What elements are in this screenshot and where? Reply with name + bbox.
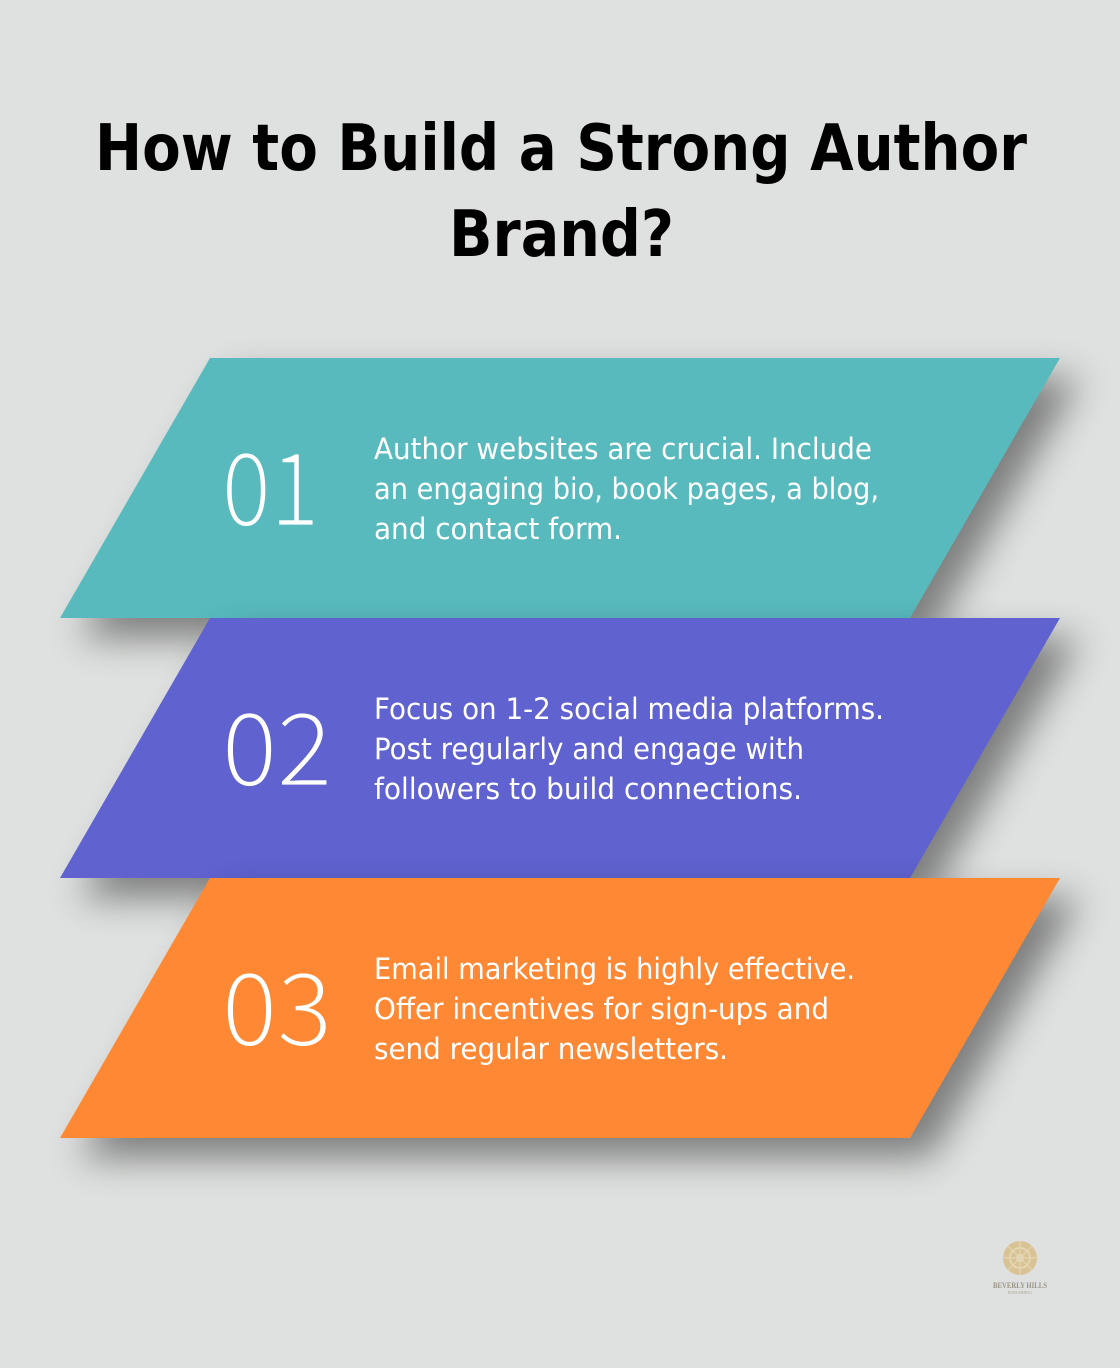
text: step 01 description	[374, 432, 879, 546]
text: step 02 description	[374, 692, 884, 806]
text: step 01 description: Author websites are crucial. Include	[374, 432, 872, 466]
panel: step 02	[60, 618, 1060, 878]
icon: gold medallion	[1003, 1241, 1037, 1275]
text: step 01 description: and contact form.	[374, 512, 622, 546]
purple parallelogram	[60, 618, 1060, 878]
logo tagline: PUBLISHING	[1008, 1290, 1032, 1295]
logo: Beverly Hills Publishing	[993, 1241, 1047, 1295]
text: step 02 description: followers to build connections.	[374, 772, 802, 806]
title: Brand?	[449, 198, 674, 272]
panel: step 01	[60, 358, 1060, 618]
number 01: 01	[222, 409, 319, 554]
text: step 03 description: Email marketing is highly effective.	[374, 952, 855, 986]
panel: step 03	[60, 878, 1060, 1138]
logo wordmark: BEVERLY HILLS	[993, 1281, 1047, 1290]
text: step 03 description	[374, 952, 855, 1066]
text: step 03 description: send regular newsletters.	[374, 1032, 728, 1066]
orange parallelogram	[60, 878, 1060, 1138]
text: step 03 description: Offer incentives for sign-ups and	[374, 992, 829, 1026]
number 02: 02	[222, 669, 332, 814]
text: step 01 description: an engaging bio, book pages, a blog,	[374, 472, 879, 506]
text: step 02 description: Focus on 1-2 social media platforms.	[374, 692, 884, 726]
text: step 02 description: Post regularly and engage with	[374, 732, 804, 766]
number 03: 03	[222, 929, 332, 1074]
teal parallelogram	[60, 358, 1060, 618]
title	[95, 112, 1027, 272]
